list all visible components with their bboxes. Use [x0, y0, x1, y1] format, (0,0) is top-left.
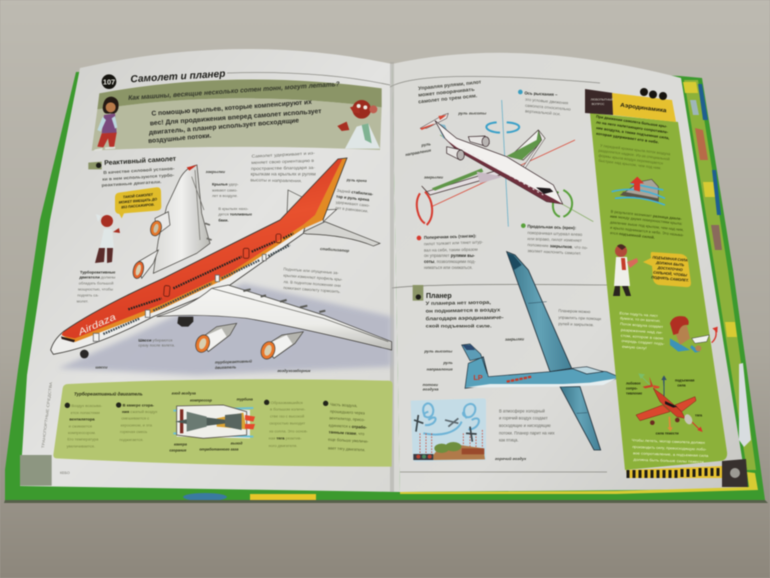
- text: wings: [212, 182, 253, 222]
- decorative dots: [640, 88, 667, 100]
- step 2: В камере сгора-: [123, 403, 155, 408]
- step 3: [264, 400, 308, 448]
- step 1: вентилятора: [69, 417, 95, 422]
- paper experiment text: разрежение над ли-: [621, 328, 664, 335]
- diagram labels: отработанного газа: [199, 448, 238, 452]
- pressure text: ния между двумя поверхностями крыла:: [610, 214, 683, 226]
- paper experiment text: стом, которое в свою: [621, 334, 664, 341]
- step 2: [116, 402, 157, 442]
- text: tail: Задний стабилиза-: [337, 188, 374, 197]
- panel: three axes: [405, 79, 593, 270]
- illustration: jet airliner: [51, 158, 392, 375]
- flight text: [632, 438, 709, 464]
- intro text: которая удерживает его в небе.: [596, 132, 659, 144]
- doors: [93, 234, 281, 341]
- labels: glider: направления: [427, 366, 453, 371]
- yaw axis text: самолета относительно: [525, 103, 572, 112]
- tab: glider heading: Планер: [426, 293, 452, 300]
- intro text: самолет по трем осям.: [418, 93, 478, 105]
- step 2: горючая смесь: [120, 429, 147, 434]
- step 3: скоростью выходит: [269, 421, 305, 426]
- cockpit windows: [61, 336, 75, 342]
- labels: glider: руль: [442, 360, 453, 365]
- left page: [20, 49, 400, 492]
- text: turbojet engines note: обладать большой: [79, 280, 113, 285]
- flight text: должна быть больше силы тяжести.: [633, 458, 705, 464]
- callout: yellow bubble: ТАКОЙ САМОЛЕТ: [123, 193, 154, 199]
- icon: scientist: [337, 100, 380, 149]
- header label: [591, 98, 613, 106]
- yaw axis text: вертикальной оси.: [525, 108, 561, 116]
- step 4: еще больше увеличи-: [328, 437, 369, 444]
- panel: aerodynamics sidebar: [585, 88, 727, 470]
- right page: [390, 53, 747, 492]
- step 2: ния сжатый воздух: [122, 409, 157, 414]
- text: gear retract: [138, 337, 175, 348]
- yaw axis text: это угловые движения: [525, 97, 568, 105]
- step 2: поджигается.: [119, 437, 144, 442]
- wing explanation: быстрее над крылом, чем под ним.: [598, 159, 662, 170]
- force labels: сила: [677, 383, 686, 387]
- text: controls note: меняет свою ориентацию в: [251, 158, 315, 165]
- paper experiment text: бумаги, то он взлетит.: [620, 316, 661, 323]
- text: pitch axis: пилот толкает или тянет штур-: [424, 239, 484, 246]
- illustration: business jet: [420, 113, 563, 204]
- text: atmosphere: и горячий воздух создает: [499, 415, 548, 420]
- panel background: [53, 379, 393, 467]
- upper engines: [131, 212, 170, 280]
- text: control note: управлять при помощи: [558, 315, 601, 321]
- axis: lateral red: [432, 140, 575, 207]
- callout: yellow bubble: 853 ПАССАЖИРОВ.: [121, 203, 155, 209]
- text: wings: Крылья удер-: [212, 182, 239, 187]
- text: control note: рулей и закрылков.: [558, 321, 594, 327]
- diagram labels: выход: [231, 442, 243, 446]
- icon: girl: [93, 97, 119, 151]
- text: pitch axis: соты, позволяющими под-: [424, 259, 476, 264]
- callout: yellow bubble in sidebar: СИЛЬНОЙ, ЧТОБЫ: [653, 271, 687, 278]
- step 4: вентилятор, присо-: [329, 415, 366, 422]
- panel: sidebar upper content: [591, 98, 685, 240]
- callout: yellow bubble: [115, 187, 161, 218]
- text: controls note: пространстве благодаря за-: [251, 165, 316, 171]
- text: glider intro: он поднимается в воздух: [426, 307, 501, 315]
- intro text: ние воздуха, а также подъемная сила,: [596, 126, 670, 140]
- airline logo: Airdaza: [76, 312, 117, 338]
- label: turbojet: турбореактивный: [215, 359, 253, 365]
- header: yellow tab: [612, 93, 676, 122]
- text: turbojet engines note: Турбореактивные: [80, 269, 116, 274]
- footer number: КЕБО: [60, 471, 70, 475]
- shadow: [58, 283, 392, 375]
- text: atmosphere: как птица.: [499, 438, 519, 443]
- fuselage: [51, 220, 307, 354]
- diagram labels: сгорания: [169, 448, 187, 452]
- pressure text: ется подъемной силой.: [610, 231, 655, 240]
- text: control note: Планером можно: [558, 308, 591, 314]
- text: flaps note: ла. В поднятом положении они: [283, 279, 341, 288]
- text: jet intro: [101, 166, 175, 188]
- step 3: Образовавшийся: [271, 400, 303, 405]
- icon: small scientist on left page: [95, 214, 120, 263]
- heading: Турбореактивный двигатель: [74, 391, 143, 396]
- text: wings: баки.: [218, 217, 229, 222]
- step 1: Воздух всасыва-: [71, 403, 103, 408]
- header label: ЛЮБОПЫТНЫЙ: [591, 98, 613, 102]
- step 4: прошедшего через: [330, 409, 365, 415]
- label: gear: шасси: [95, 366, 108, 370]
- far wing: [153, 165, 212, 273]
- force labels: подъемная: [675, 379, 694, 383]
- icon: wing profile: [612, 177, 665, 205]
- text: jet intro: ки в нем используются турбо-: [102, 172, 175, 182]
- text: pitch axis: он управляет рулями вы-: [424, 253, 475, 258]
- paper experiment text: Если подуть на лист: [619, 311, 658, 318]
- labels: glider: воздуха: [423, 387, 439, 392]
- text: pitch axis: Поперечная ось (тангаж):: [424, 233, 476, 240]
- step 4: единяется к отрабо-: [329, 423, 368, 430]
- answer text: двигатель, а планер использует восходящие: [149, 117, 300, 137]
- step 4: вает тягу двигателя.: [328, 445, 366, 452]
- callout: yellow bubble in sidebar: ПОДНЯТЬ САМОЛЕТ.: [651, 275, 689, 283]
- step 4: танным газам, что: [329, 429, 365, 436]
- near tailplane: [302, 222, 380, 246]
- diagram labels: компрессор: [190, 398, 213, 402]
- yaw axis text: [518, 90, 572, 116]
- pressure text: В результате возникает разница давле-: [611, 210, 683, 221]
- question heading: Как машины, весящие несколько сотен тонн, могут летать?: [128, 81, 340, 102]
- tab: corner block: [20, 455, 52, 486]
- text: turbojet engines note: молет.: [77, 298, 88, 303]
- text: controls note: [250, 150, 316, 183]
- right side decorative strip: [683, 80, 756, 470]
- text: wings: дятся топливные: [218, 212, 253, 217]
- text: atmosphere: В атмосфере холодный: [499, 409, 545, 414]
- text: turbojet engines note: [77, 269, 116, 303]
- intro text: При движении самолета большое кры-: [596, 115, 668, 129]
- landing gear: [80, 317, 193, 358]
- wing explanation: формы крыла воздух перемещается: [598, 154, 663, 166]
- axis: longitudinal green: [440, 135, 593, 222]
- labels: glider: [423, 336, 527, 461]
- text: roll axis: зволяет наклонить самолет.: [527, 248, 581, 256]
- step 3: из сопла. Это основ-: [269, 428, 308, 433]
- page number badge: [102, 74, 116, 89]
- flight text: производить силу, превосходящую лобо-: [632, 445, 707, 452]
- wing explanation: [598, 144, 671, 170]
- label: flaps: закрылки: [206, 170, 226, 174]
- corner badge: [722, 459, 748, 487]
- intro text: ло на него налетающего сопротивле-: [596, 120, 669, 135]
- text: flaps note: крылки изменяют профиль кры-: [283, 273, 343, 282]
- rotation arrow: roll: [553, 190, 572, 217]
- section label: ТРАНСПОРТНЫЕ СРЕДСТВА: [41, 381, 53, 448]
- callout: yellow bubble in sidebar: ДОСТАТОЧНО: [656, 266, 683, 272]
- header: dark tab: [585, 89, 613, 115]
- near wing: [157, 285, 392, 350]
- text: wings: лет в воздухе.: [212, 193, 238, 198]
- fuselage paint: [62, 158, 347, 342]
- paper experiment text: Поток воздуха создает: [620, 322, 664, 329]
- text: flaps note: помогают самолету тормозить.: [283, 285, 341, 294]
- label: flaps: закрылки: [424, 175, 444, 180]
- text: glider intro: ской подъемной силе.: [426, 323, 492, 330]
- text: jet intro: реактивные двигатели.: [101, 179, 162, 188]
- step 1: компрессором.: [68, 430, 96, 435]
- yaw axis text: Ось рыскания –: [524, 90, 558, 97]
- text: roll axis: Продольная ось (крен):: [527, 224, 576, 230]
- diagram: engine cross-section: [173, 405, 255, 438]
- yellow bottom edge: [400, 472, 758, 494]
- callout: yellow bubble: МОЖЕТ ВМЕЩАТЬ ДО: [119, 197, 157, 205]
- panel: answer background: [92, 98, 382, 151]
- pressure text: и крыло поднимается в небо. Это называ-: [610, 226, 685, 237]
- step 1: ется лопастями: [71, 410, 100, 415]
- book cover: [4, 64, 768, 503]
- step 2: керосином, и эта: [121, 422, 153, 427]
- step 1: и сжимается: [69, 423, 92, 428]
- step 1: увеличивается.: [67, 444, 95, 449]
- wing explanation: разделяется надвое. Из-за специальной: [598, 149, 670, 161]
- tab: glider heading: [413, 285, 452, 301]
- panel: turbojet engine: [20, 379, 393, 486]
- label: turbojet: двигатель: [215, 365, 237, 370]
- label: rudder: направления: [405, 147, 432, 157]
- step 3: ного двигателя.: [269, 443, 297, 448]
- intro text: может поворачивать: [418, 87, 475, 99]
- force labels: сопро-: [626, 387, 638, 391]
- force labels: тяга: [695, 414, 702, 418]
- force labels: тивление: [626, 392, 642, 396]
- rotation arrow: yaw: [486, 122, 519, 133]
- diagram labels: вход воздуха: [172, 391, 196, 395]
- windows: [103, 233, 293, 334]
- axis: vertical blue: [502, 100, 508, 227]
- label: elevator: руль высоты: [457, 110, 487, 115]
- header label: ВОПРОС: [592, 102, 605, 106]
- intro text: Управляя рулями, пилот: [418, 79, 482, 92]
- illustration: red aerobatic plane with forces: [636, 373, 703, 432]
- page number badge: 107: [103, 77, 115, 86]
- answer text: вес! Для продвижения вперед самолет использует: [150, 108, 322, 127]
- text: turbojet engines note: двигатели должны: [79, 275, 116, 280]
- intro text: [596, 115, 670, 144]
- label: stabilizer: стабилизатор: [320, 247, 350, 253]
- answer text: воздушные потоки.: [148, 132, 212, 145]
- step 2: смешивается с: [121, 416, 149, 421]
- text: controls note: крылкам на крыльях и рулям: [251, 172, 316, 177]
- flight text: Чтобы лететь, мотор самолета должен: [632, 438, 705, 445]
- text: atmosphere: [499, 409, 556, 443]
- step 3: ная тяга реактив-: [269, 436, 302, 441]
- force labels: сила тяжести: [656, 432, 679, 436]
- label: air intake: воздухозаборник: [277, 369, 311, 373]
- text: glider intro: У планера нет мотора,: [426, 300, 492, 307]
- intro text: [418, 79, 482, 105]
- labels: glider: закрылки: [505, 336, 525, 342]
- label: rudder: [405, 141, 432, 157]
- text: pitch axis: вал на себя, таким образом: [424, 247, 478, 253]
- panel: sidebar lower content: [619, 311, 718, 464]
- paper experiment text: очередь создает подъ-: [621, 339, 666, 346]
- text: glider intro: [426, 300, 504, 330]
- text: wings: В крыльях нахо-: [218, 206, 249, 211]
- icon: rocket: [739, 363, 751, 447]
- diagram labels: камера: [174, 443, 187, 447]
- text: roll axis: или вправо, пилот изменяет: [527, 236, 582, 243]
- text: wings: живают само-: [212, 187, 238, 192]
- illustration: glider: [462, 252, 620, 450]
- text: pitch axis: ниматься или снижаться.: [424, 265, 473, 270]
- text: jet intro: В качестве силовой установ-: [103, 166, 175, 175]
- diagram labels: [169, 391, 253, 452]
- text: glider intro: благодаря аэродинамиче-: [426, 314, 504, 322]
- lower engines: [193, 323, 303, 361]
- force labels: лобовое: [626, 382, 641, 386]
- icon: scientist with callout: [613, 244, 638, 296]
- text: pitch axis: [417, 233, 484, 270]
- illustration: air currents: [411, 398, 486, 462]
- text: turbojet engines note: поднять са-: [77, 292, 100, 297]
- tab: jet section heading: [88, 155, 177, 169]
- diagram labels: турбина: [237, 398, 253, 402]
- text: turbojet engines note: мощностью, чтобы: [78, 286, 113, 291]
- answer text: С помощью крыльев, которые компенсируют их: [151, 99, 312, 118]
- hazard stripe: [626, 466, 722, 478]
- callout: yellow bubble in sidebar: [643, 252, 691, 287]
- far tailplane and small stabilizer: [287, 190, 337, 222]
- panel: question band: [97, 79, 382, 109]
- step 1: Его температура: [67, 437, 99, 442]
- text: tail: удерживают само-: [336, 199, 371, 208]
- step 3: в большом количе-: [270, 407, 306, 412]
- text: roll axis: положение закрылков, что по-: [527, 242, 588, 250]
- text: tail: [335, 188, 374, 213]
- text: roll axis: [521, 223, 588, 256]
- panel: glider: [411, 252, 620, 462]
- text: roll axis: поворачивая штурвал влево: [527, 230, 583, 237]
- text: control note: [558, 308, 601, 327]
- paper experiment text: [619, 311, 666, 350]
- text: tail: лет в равновесии.: [335, 205, 369, 213]
- callout: yellow bubble in sidebar: ПОДЪЕМНАЯ СИЛА: [652, 255, 688, 263]
- label: rudder: руль крена: [346, 178, 367, 183]
- step 3: стве газ с высокой: [270, 414, 304, 419]
- labels: glider: руль высоты: [423, 348, 453, 353]
- tab: jet section heading: Реактивный самолет: [104, 155, 177, 167]
- callout: yellow bubble in sidebar: ДОЛЖНА БЫТЬ: [655, 261, 685, 267]
- text: flaps note: Поднятые или опущенные за-: [283, 266, 339, 275]
- pressure text: [610, 210, 685, 240]
- icon: boy blowing paper: [670, 316, 718, 353]
- illustration: glider: LP: [473, 373, 483, 382]
- text: tail: тор и руль крена: [336, 194, 370, 202]
- text: gear retract: Шасси убираются: [138, 337, 172, 342]
- flight text: вое сопротивление, а подъемная сила: [633, 451, 709, 458]
- text: controls note: высоты и направления.: [250, 177, 302, 183]
- paper experiment text: емную силу!: [622, 345, 647, 350]
- text: gear retract: сразу после взлета.: [138, 343, 175, 348]
- rotation arrow: pitch: [417, 192, 432, 225]
- label: turbojet: [215, 359, 253, 370]
- text: flaps note: [283, 266, 343, 294]
- step 4: Часть воздуха,: [330, 402, 358, 408]
- step 4: [323, 401, 369, 452]
- text: atmosphere: потоки. Планер парит на них: [499, 431, 556, 436]
- wing explanation: У передней кромки крыла поток воздуха: [600, 144, 671, 156]
- label: rudder: руль: [420, 141, 432, 148]
- step 1: [65, 403, 103, 449]
- text: atmosphere: восходящие и нисходящие: [499, 423, 552, 428]
- answer text: [148, 99, 322, 145]
- text: controls note: Самолет удерживает и из-: [251, 150, 316, 159]
- force labels: [626, 379, 702, 436]
- header title: Аэродинамика: [620, 103, 668, 114]
- labels: glider: горячий воздух: [495, 456, 527, 461]
- labels: glider: потоки: [423, 382, 438, 387]
- panel: header and question (left page top): [88, 69, 382, 222]
- title: Самолет и планер: [130, 69, 226, 85]
- pressure text: давление выше под крылом, чем над ним,: [610, 220, 684, 232]
